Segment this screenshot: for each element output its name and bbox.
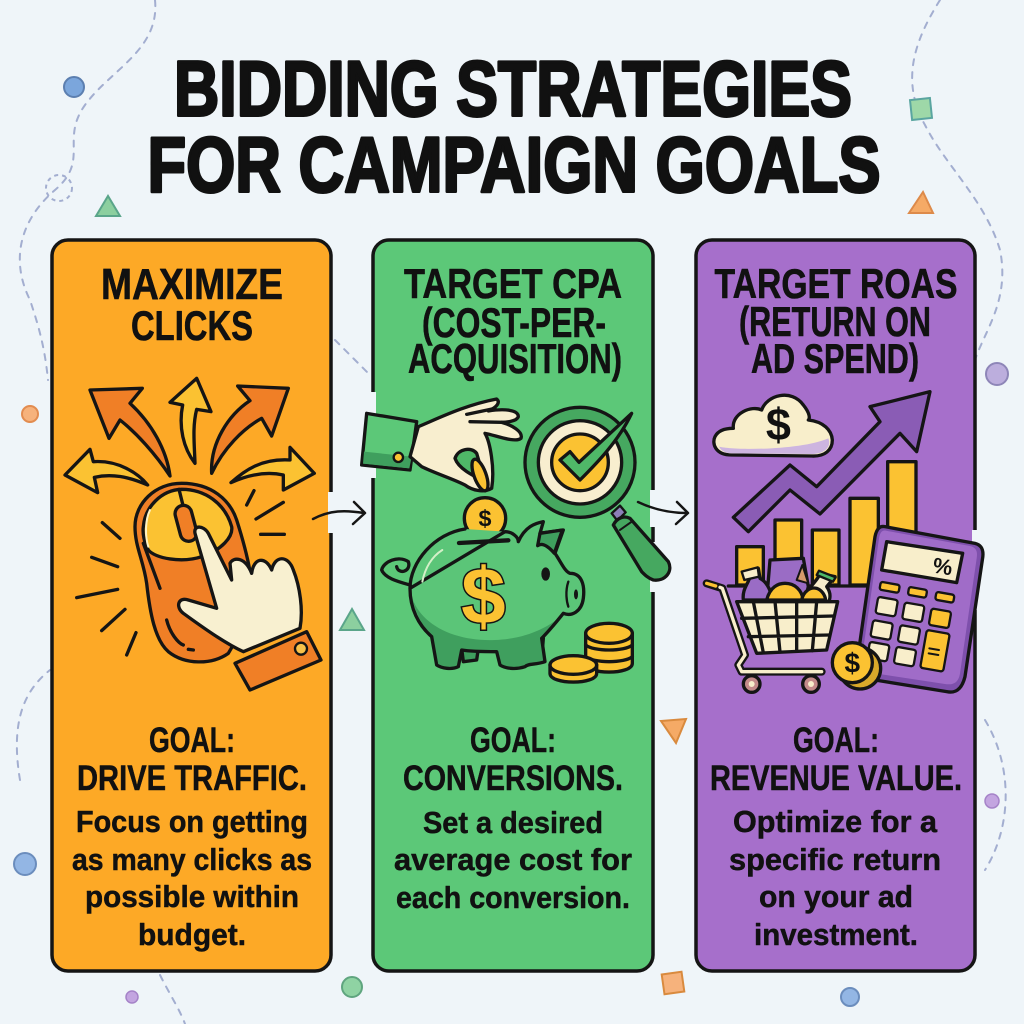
goal text: Optimize for a xyxy=(733,804,938,839)
goal text: on your ad xyxy=(759,879,913,914)
goal text: investment. xyxy=(754,917,918,952)
title: BIDDING STRATEGIES xyxy=(174,44,852,132)
coin near cart xyxy=(832,643,881,689)
heading: target cpa: (COST-PER- xyxy=(422,299,606,346)
goal text: budget. xyxy=(138,917,246,952)
heading: maximize clicks xyxy=(101,260,283,349)
calculator: % xyxy=(931,553,954,580)
heading: target roas: AD SPEND) xyxy=(751,335,919,382)
heading: target roas xyxy=(714,260,958,382)
coin entering slot xyxy=(464,498,506,539)
icon: hand, coin, magnifier, piggy bank and coins xyxy=(362,399,670,682)
goal text xyxy=(710,721,962,952)
shopping cart with groceries xyxy=(707,558,838,692)
calculator xyxy=(857,526,983,692)
goal text: average cost for xyxy=(394,842,632,877)
title xyxy=(148,44,880,208)
goal text: Focus on getting xyxy=(76,804,308,839)
goal text: Set a desired xyxy=(423,805,603,840)
magnifier with check mark xyxy=(525,407,670,580)
cloud with dollar: $ xyxy=(766,399,791,450)
icon: arrows, mouse and pointing hand xyxy=(65,378,321,690)
goal text: each conversion. xyxy=(396,880,630,915)
piggy bank xyxy=(382,522,584,668)
goal text: specific return xyxy=(729,842,941,877)
heading: target cpa: TARGET CPA xyxy=(404,260,622,307)
goal text xyxy=(394,721,632,915)
goal text: CONVERSIONS. xyxy=(403,759,623,798)
heading: maximize clicks: MAXIMIZE xyxy=(101,260,283,309)
heading: target cpa: ACQUISITION) xyxy=(408,335,622,382)
heading: target cpa xyxy=(404,260,622,382)
panel: maximize clicks xyxy=(52,240,334,971)
goal text: DRIVE TRAFFIC. xyxy=(77,759,307,798)
goal text: possible within xyxy=(85,879,299,914)
sleeve and hand dropping coin xyxy=(362,399,521,493)
goal text: GOAL: xyxy=(149,721,235,760)
goal text: as many clicks as xyxy=(72,842,312,877)
rising arrow xyxy=(733,392,930,532)
arrow: second to third panel xyxy=(638,502,688,524)
goal text: GOAL: xyxy=(793,721,879,760)
far pig legs xyxy=(462,638,543,662)
coin stacks xyxy=(550,623,632,682)
icon: cloud, chart, arrow, cart, coin and calculator xyxy=(707,392,983,692)
piggy bank: $ xyxy=(461,551,506,640)
panel: target cpa xyxy=(362,240,670,971)
goal text: GOAL: xyxy=(470,721,556,760)
heading: target roas: TARGET ROAS xyxy=(714,260,958,307)
heading: maximize clicks: CLICKS xyxy=(131,302,253,349)
bar chart xyxy=(728,462,916,586)
panel: target roas xyxy=(696,240,983,971)
goal text xyxy=(72,721,312,952)
goal text: REVENUE VALUE. xyxy=(710,759,962,798)
heading: target roas: (RETURN ON xyxy=(739,298,931,345)
arrow: first to second panel xyxy=(313,502,365,524)
coin entering slot: $ xyxy=(479,506,492,532)
coin near cart: $ xyxy=(845,648,861,679)
cloud with dollar xyxy=(714,395,832,456)
